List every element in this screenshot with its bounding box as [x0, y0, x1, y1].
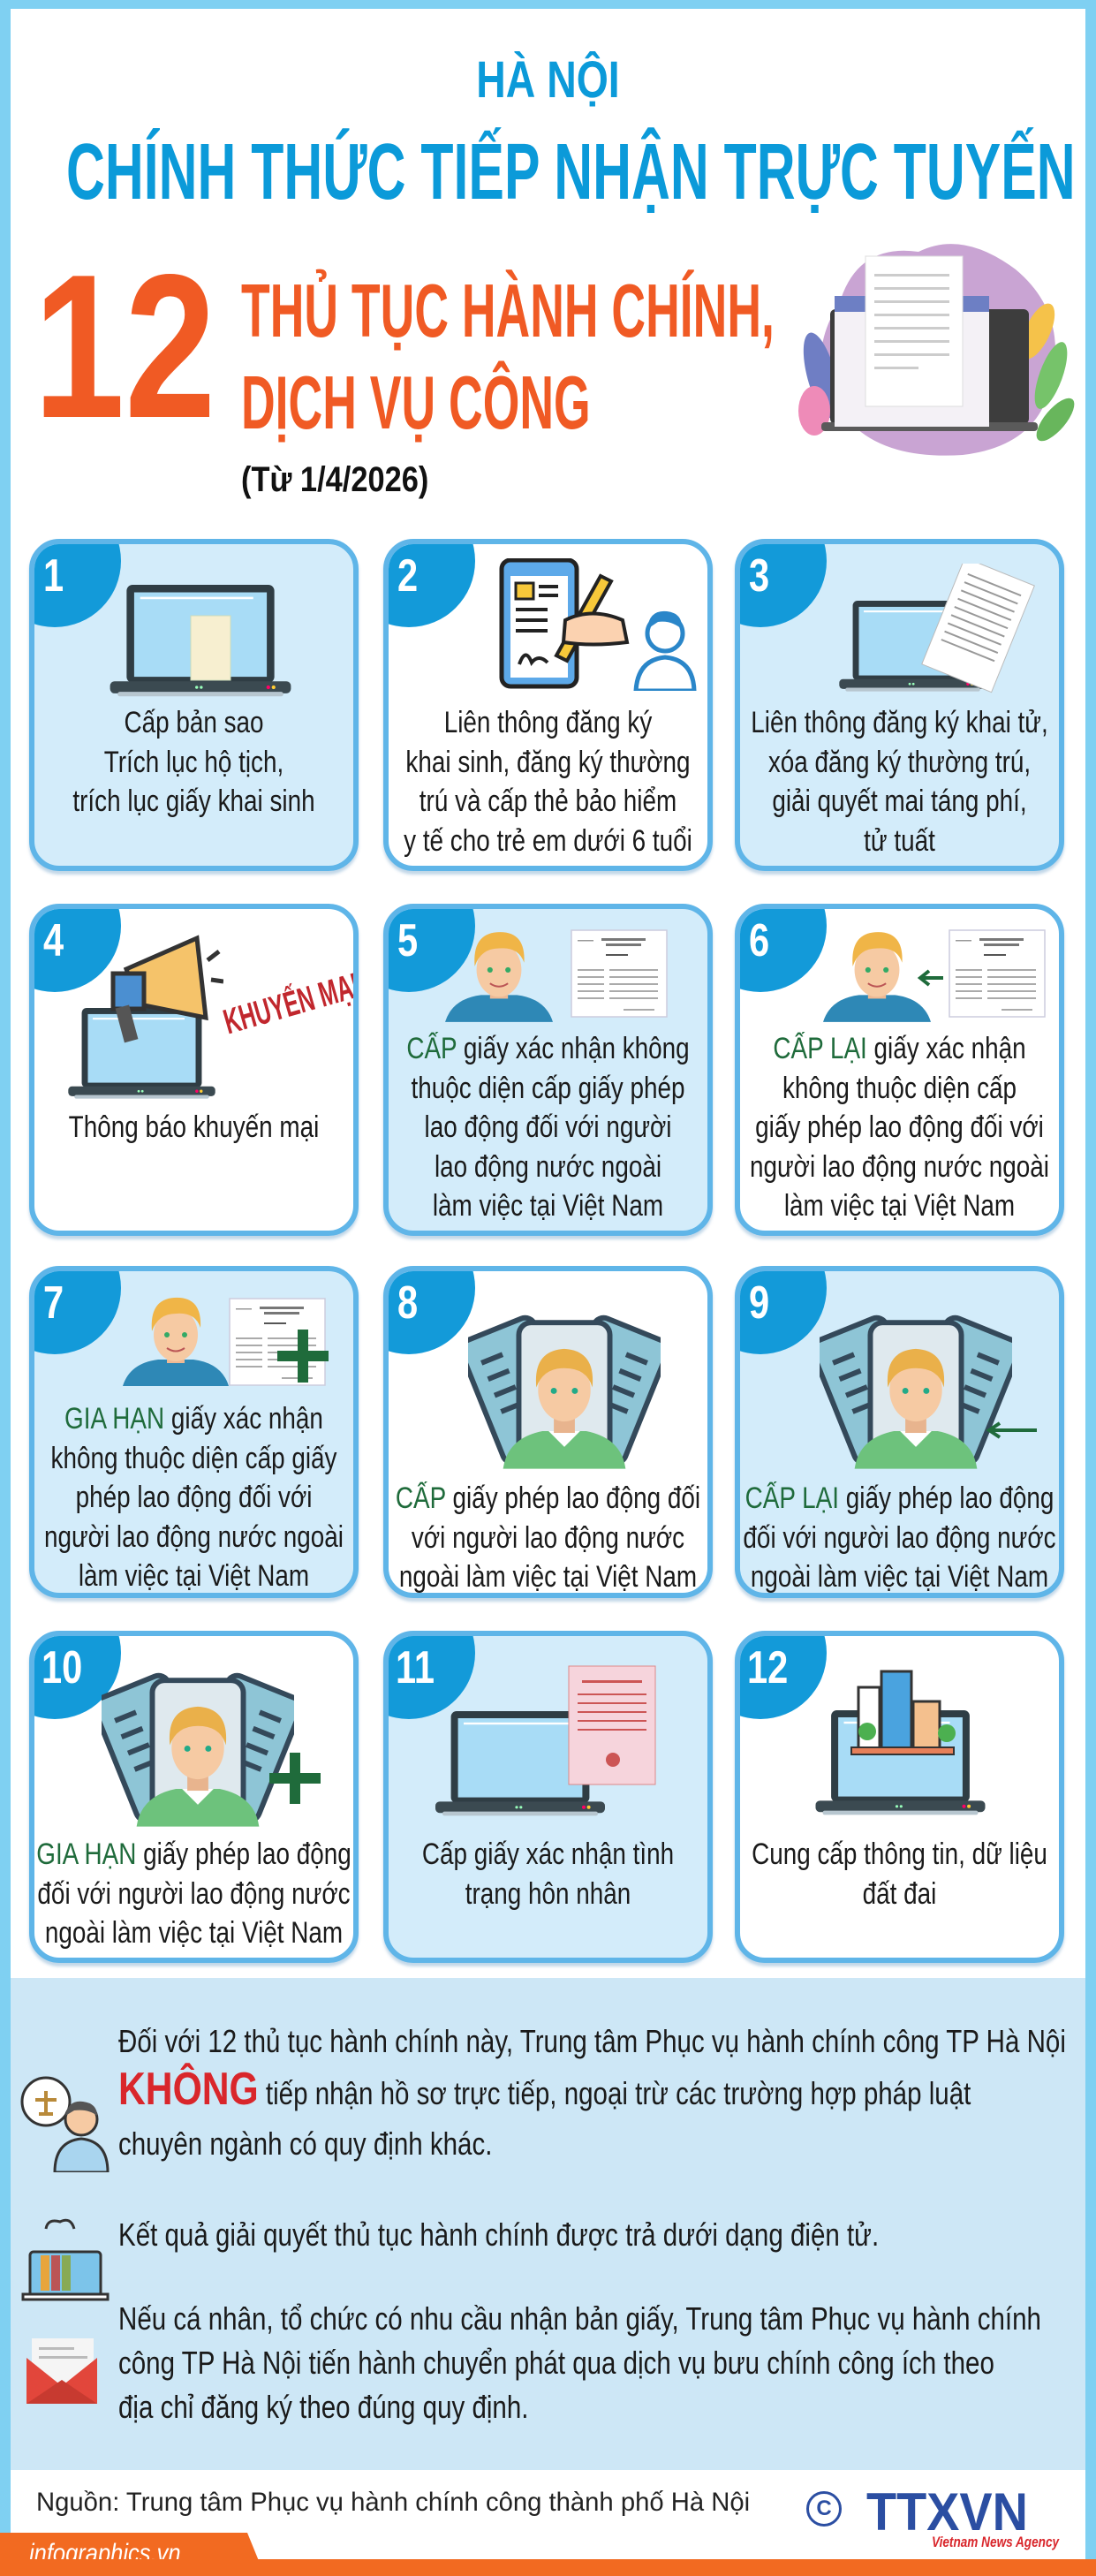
title: CHÍNH THỨC TIẾP NHẬN TRỰC TUYẾN: CHÍNH THỨC TIẾP NHẬN TRỰC TUYẾN: [66, 128, 1076, 216]
text 5: [406, 1032, 690, 1223]
text 3: [751, 706, 1048, 857]
text 4: Thông báo khuyến mại: [69, 1110, 319, 1144]
text 1: Cấp bản sao: [124, 706, 264, 739]
source: Nguồn: Trung tâm Phục vụ hành chính công thành phố Hà Nội: [36, 2488, 750, 2517]
icon: laptop with buildings: [816, 1670, 986, 1815]
footer stripe: [0, 2559, 1096, 2576]
text 2: [404, 706, 692, 857]
text 9: ngoài làm việc tại Việt Nam: [751, 1560, 1048, 1594]
text 11: [422, 1837, 674, 1910]
badge 6: [694, 860, 827, 992]
title: number 12: 12: [34, 232, 215, 461]
card 2: [383, 539, 713, 871]
text 9: CẤP LẠI giấy phép lao động: [745, 1481, 1054, 1515]
badge 10: [0, 1587, 121, 1719]
text 6: người lao động nước ngoài: [750, 1150, 1049, 1184]
badge 6: 6: [749, 915, 769, 966]
text 8: [396, 1481, 700, 1594]
badge 5: [343, 860, 475, 992]
text 1: [72, 706, 315, 818]
text 5: CẤP giấy xác nhận không: [406, 1032, 690, 1065]
badge 3: 3: [749, 550, 769, 602]
icon: ID cards with arrow: [820, 1315, 1037, 1469]
text: notice 1: chuyên ngành có quy định khác.: [118, 2125, 492, 2162]
card 7: [29, 1266, 359, 1598]
icon: laptop with certificate: [110, 585, 291, 696]
text: notice 3: [118, 2300, 1041, 2425]
text 5: lao động đối với người: [424, 1110, 671, 1144]
subtitle: date: (Từ 1/4/2026): [241, 460, 428, 499]
text 7: GIA HẠN giấy xác nhận: [64, 1402, 323, 1436]
badge 11: [343, 1587, 475, 1719]
icon: laptop with megaphone: [68, 935, 223, 1099]
card 11: [383, 1631, 713, 1963]
title: THỦ TỤC HÀNH CHÍNH, DỊCH VỤ CÔNG: [241, 269, 775, 445]
text: notice 1: KHÔNG tiếp nhận hồ sơ trực tiếp, ngoại trừ các trường hợp pháp luật: [118, 2064, 971, 2115]
icon: ID cards with plus: [102, 1673, 321, 1827]
header illustration: laptop with document: [798, 244, 1074, 456]
icon: person, document, plus: [123, 1297, 329, 1386]
text 10: đối với người lao động nước: [37, 1876, 351, 1910]
badge 9: [694, 1222, 827, 1354]
badge 12: 12: [747, 1642, 788, 1693]
logo: TTXVN: Vietnam News Agency: [932, 2534, 1059, 2550]
title: HÀ NỘI: HÀ NỘI: [476, 51, 620, 109]
badge 5: 5: [397, 915, 418, 966]
text 2: y tế cho trẻ em dưới 6 tuổi: [404, 823, 692, 857]
text 7: người lao động nước ngoài: [44, 1519, 344, 1553]
badge 2: 2: [397, 550, 418, 602]
card 3: [735, 539, 1064, 871]
text 7: không thuộc diện cấp giấy: [51, 1442, 336, 1475]
badge 4: [0, 860, 121, 992]
icon: person with document: [445, 929, 668, 1022]
text 9: [743, 1481, 1056, 1594]
title: THỦ TỤC HÀNH CHÍNH, DỊCH VỤ CÔNG: DỊCH VỤ CÔNG: [241, 361, 591, 445]
panel: notes: [11, 1978, 1085, 2470]
text 9: đối với người lao động nước: [743, 1521, 1056, 1555]
icon: scales and official: [21, 2076, 110, 2172]
card 5: [383, 904, 713, 1236]
text 1: Trích lục hộ tịch,: [104, 746, 283, 779]
icon: laptop with books: [21, 2219, 110, 2300]
icon: envelope: [26, 2338, 97, 2404]
card 6: [735, 904, 1064, 1236]
text 2: Liên thông đăng ký: [444, 706, 652, 739]
text 7: phép lao động đối với: [76, 1481, 312, 1514]
text 10: [36, 1837, 351, 1950]
text 5: lao động nước ngoài: [435, 1150, 661, 1184]
badge 11: 11: [396, 1642, 435, 1693]
text: notice 2: Kết quả giải quyết thủ tục hành chính được trả dưới dạng điện tử.: [118, 2216, 879, 2253]
text 6: [750, 1032, 1049, 1223]
text 3: tử tuất: [864, 823, 935, 857]
text: notice 3: công TP Hà Nội tiến hành chuyển phát qua dịch vụ bưu chính công ích theo: [118, 2345, 994, 2381]
badge 3: [694, 495, 827, 627]
text 5: làm việc tại Việt Nam: [433, 1189, 663, 1223]
text 7: làm việc tại Việt Nam: [79, 1559, 309, 1593]
text 3: xóa đăng ký thường trú,: [768, 746, 1031, 779]
card 1: [29, 539, 359, 871]
text 6: không thuộc diện cấp: [782, 1071, 1017, 1104]
text: notice 3: địa chỉ đăng ký theo đúng quy định.: [118, 2389, 528, 2425]
icon: phone with pen and person: [500, 558, 696, 691]
badge 10: 10: [42, 1642, 82, 1693]
text 12: đất đai: [863, 1876, 936, 1910]
icon: laptop with paper: [839, 564, 1035, 693]
text 6: giấy phép lao động đối với: [755, 1110, 1044, 1144]
icon: person, arrow, document: [823, 929, 1046, 1022]
text 3: giải quyết mai táng phí,: [772, 784, 1027, 818]
text 1: trích lục giấy khai sinh: [72, 784, 315, 818]
text 11: trạng hôn nhân: [465, 1876, 631, 1910]
text 6: CẤP LẠI giấy xác nhận: [773, 1032, 1026, 1065]
text: notice 1: [118, 2023, 1066, 2162]
card 12: [735, 1631, 1064, 1963]
logo: TTXVN: TTXVN: [866, 2482, 1028, 2542]
icon: laptop with marriage certificate: [435, 1666, 655, 1816]
badge 12: [694, 1587, 827, 1719]
badge 1: 1: [43, 550, 64, 602]
text 5: thuộc diện cấp giấy phép: [411, 1071, 685, 1104]
card 8: [383, 1266, 713, 1598]
text: notice 3: Nếu cá nhân, tổ chức có nhu cầu nhận bản giấy, Trung tâm Phục vụ hành chính: [118, 2300, 1041, 2337]
text 11: Cấp giấy xác nhận tình: [422, 1837, 674, 1871]
badge 7: [0, 1222, 121, 1354]
text 8: CẤP giấy phép lao động đối: [396, 1481, 700, 1515]
text 6: làm việc tại Việt Nam: [784, 1189, 1015, 1223]
text 10: GIA HẠN giấy phép lao động: [36, 1837, 351, 1871]
text 3: Liên thông đăng ký khai tử,: [751, 706, 1048, 739]
footer: infographics.vn tab: [0, 2533, 258, 2559]
logo: TTXVN: C: [816, 2496, 832, 2520]
text 2: trú và cấp thẻ bảo hiểm: [420, 784, 676, 818]
text 10: ngoài làm việc tại Việt Nam: [45, 1916, 343, 1950]
badge 7: 7: [43, 1277, 64, 1329]
text: notice 1: Đối với 12 thủ tục hành chính này, Trung tâm Phục vụ hành chính công TP Hà Nội: [118, 2023, 1066, 2059]
badge 4: 4: [43, 915, 64, 966]
badge 1: [0, 495, 121, 627]
text 12: [752, 1837, 1047, 1910]
text 2: khai sinh, đăng ký thường: [405, 746, 691, 779]
text 8: với người lao động nước: [412, 1521, 684, 1555]
badge 8: 8: [397, 1277, 418, 1329]
badge 8: [343, 1222, 475, 1354]
badge 9: 9: [749, 1277, 769, 1329]
card 4: [29, 904, 359, 1236]
card 9: [735, 1266, 1064, 1598]
title: THỦ TỤC HÀNH CHÍNH, DỊCH VỤ CÔNG: THỦ TỤC HÀNH CHÍNH,: [241, 269, 775, 353]
footer: infographics.vn tab: infographics.vn: [29, 2539, 181, 2568]
badge 2: [343, 495, 475, 627]
logo: TTXVN: [806, 2482, 1060, 2550]
text 7: [44, 1402, 344, 1593]
card 10: [29, 1631, 359, 1963]
text 8: ngoài làm việc tại Việt Nam: [399, 1560, 697, 1594]
icon: ID cards with person: [468, 1315, 661, 1469]
text 12: Cung cấp thông tin, dữ liệu: [752, 1837, 1047, 1871]
